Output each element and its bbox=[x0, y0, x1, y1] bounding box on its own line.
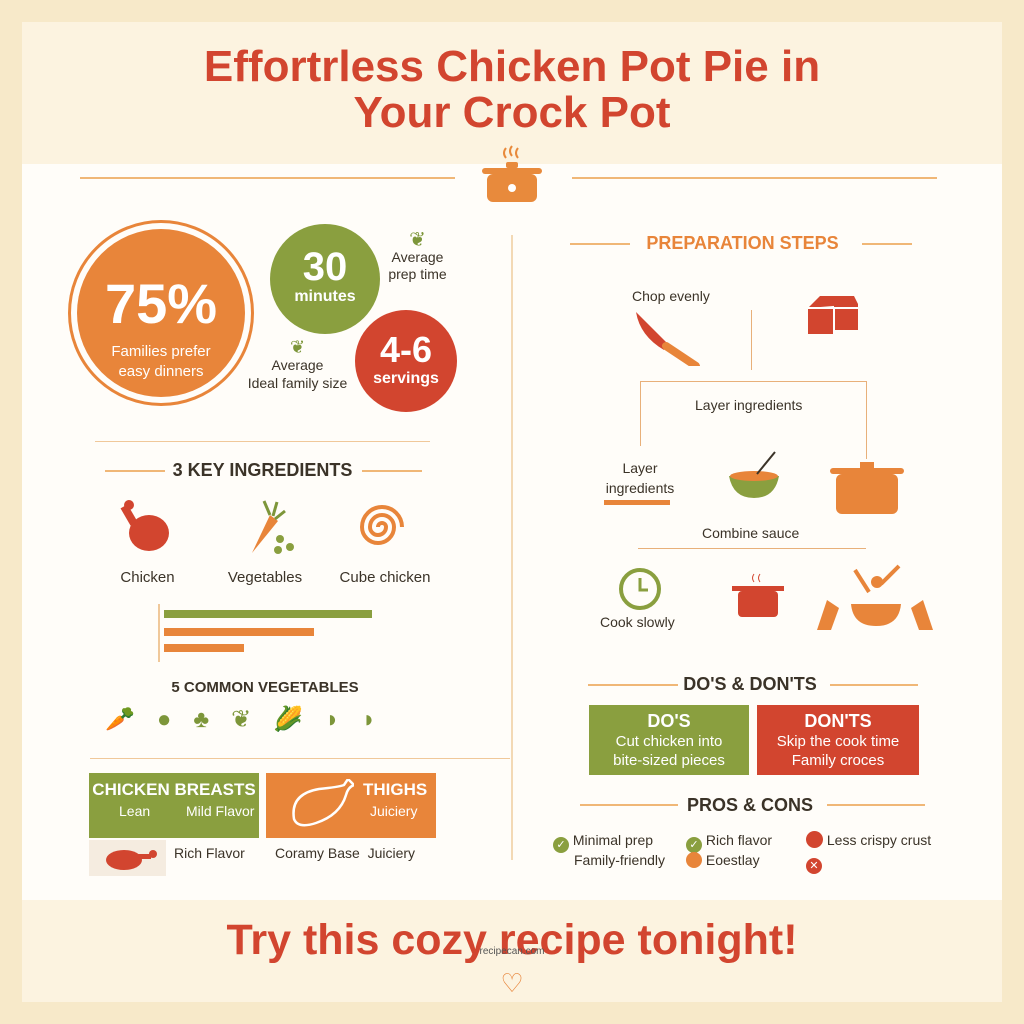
pros and cons list: Eoestlay bbox=[706, 852, 760, 868]
flowchart bbox=[600, 288, 933, 630]
stat: 75% bbox=[68, 220, 254, 406]
heading: do's & don'ts: DO'S & DON'TS bbox=[683, 674, 817, 694]
flowchart: ingredients bbox=[606, 480, 674, 496]
card: do's: bite-sized pieces bbox=[613, 752, 725, 769]
heading: preparation steps: PREPARATION STEPS bbox=[646, 233, 839, 253]
flowchart: Chop evenly bbox=[632, 288, 710, 304]
flowchart: Cook slowly bbox=[600, 614, 675, 630]
label: average prep time: Average bbox=[392, 249, 443, 265]
vegetable icons: 🥕●♣❦🌽◗◗ bbox=[105, 706, 398, 733]
text: Coramy Base Juiciery bbox=[275, 845, 415, 861]
pros and cons list bbox=[553, 831, 932, 874]
card: thighs: Juiciery bbox=[370, 803, 417, 819]
stat: 75%: Families prefer bbox=[111, 343, 211, 360]
label: family size: Ideal family size bbox=[248, 375, 347, 391]
pros and cons list: Family-friendly bbox=[574, 852, 665, 868]
card: don'ts: DON'TS bbox=[804, 711, 872, 731]
label: average prep time: ❦ bbox=[409, 229, 426, 251]
ingredient icons: Cube chicken bbox=[340, 569, 430, 586]
heading: pros & cons: PROS & CONS bbox=[687, 795, 813, 815]
divider vertical bbox=[511, 235, 513, 860]
card: chicken breasts: Mild Flavor bbox=[186, 803, 254, 819]
card: do's bbox=[589, 705, 749, 775]
flowchart: Combine sauce bbox=[702, 525, 799, 541]
ingredient icons bbox=[120, 500, 430, 586]
stat: 30 minutes: minutes bbox=[294, 288, 356, 305]
title: Your Crock Pot bbox=[353, 88, 670, 137]
label: family size: ❦ bbox=[290, 337, 305, 357]
heading: key ingredients: 3 KEY INGREDIENTS bbox=[173, 460, 352, 480]
stat: 75%: easy dinners bbox=[118, 363, 204, 380]
card: do's: DO'S bbox=[647, 711, 691, 731]
icon: heart: ♡ bbox=[500, 968, 524, 998]
title: Effortrless Chicken Pot Pie in bbox=[204, 42, 820, 91]
heading: common vegetables: 5 COMMON VEGETABLES bbox=[171, 679, 359, 696]
pros and cons list: ✕ bbox=[809, 860, 819, 872]
card: chicken breasts bbox=[89, 773, 259, 838]
icon: crock pot bbox=[482, 145, 542, 202]
stat: 75%: 75% bbox=[105, 272, 217, 335]
footer band bbox=[22, 900, 1002, 1002]
pros and cons list: ✓ bbox=[556, 839, 566, 851]
title band bbox=[22, 22, 1002, 164]
stat: 30 minutes bbox=[270, 224, 380, 334]
label: family size: Average bbox=[272, 357, 323, 373]
flowchart: Layer bbox=[622, 460, 658, 476]
card: thighs: THIGHS bbox=[363, 780, 427, 799]
label: family size bbox=[248, 337, 347, 391]
bar chart bbox=[158, 604, 373, 662]
pros and cons list: Minimal prep bbox=[573, 832, 653, 848]
footer band: recipecan.com bbox=[479, 946, 545, 957]
text: Rich Flavor bbox=[174, 845, 245, 861]
stat: 4-6 servings: 4-6 bbox=[380, 329, 432, 370]
stat: 4-6 servings bbox=[355, 310, 457, 412]
stat: 30 minutes: 30 bbox=[303, 245, 347, 289]
pros and cons list: ✓ bbox=[689, 839, 699, 851]
card: don'ts: Skip the cook time bbox=[777, 733, 899, 750]
card: thighs bbox=[266, 773, 436, 838]
chicken mini icon bbox=[89, 840, 166, 876]
card: don'ts bbox=[757, 705, 919, 775]
flowchart: Layer ingredients bbox=[695, 397, 802, 413]
card: chicken breasts: Lean bbox=[119, 803, 150, 819]
ingredient icons: Vegetables bbox=[228, 569, 302, 586]
pros and cons list: Less crispy crust bbox=[827, 832, 931, 848]
label: average prep time: prep time bbox=[388, 266, 447, 282]
card: don'ts: Family croces bbox=[792, 752, 884, 769]
pros and cons list: Rich flavor bbox=[706, 832, 772, 848]
title bbox=[204, 42, 820, 137]
ingredient icons: Chicken bbox=[120, 569, 175, 586]
footer text: Try this cozy recipe tonight! bbox=[226, 916, 798, 964]
label: average prep time bbox=[388, 229, 447, 282]
card: do's: Cut chicken into bbox=[616, 733, 722, 750]
card: chicken breasts: CHICKEN BREASTS bbox=[92, 780, 256, 799]
stat: 4-6 servings: servings bbox=[373, 370, 439, 387]
